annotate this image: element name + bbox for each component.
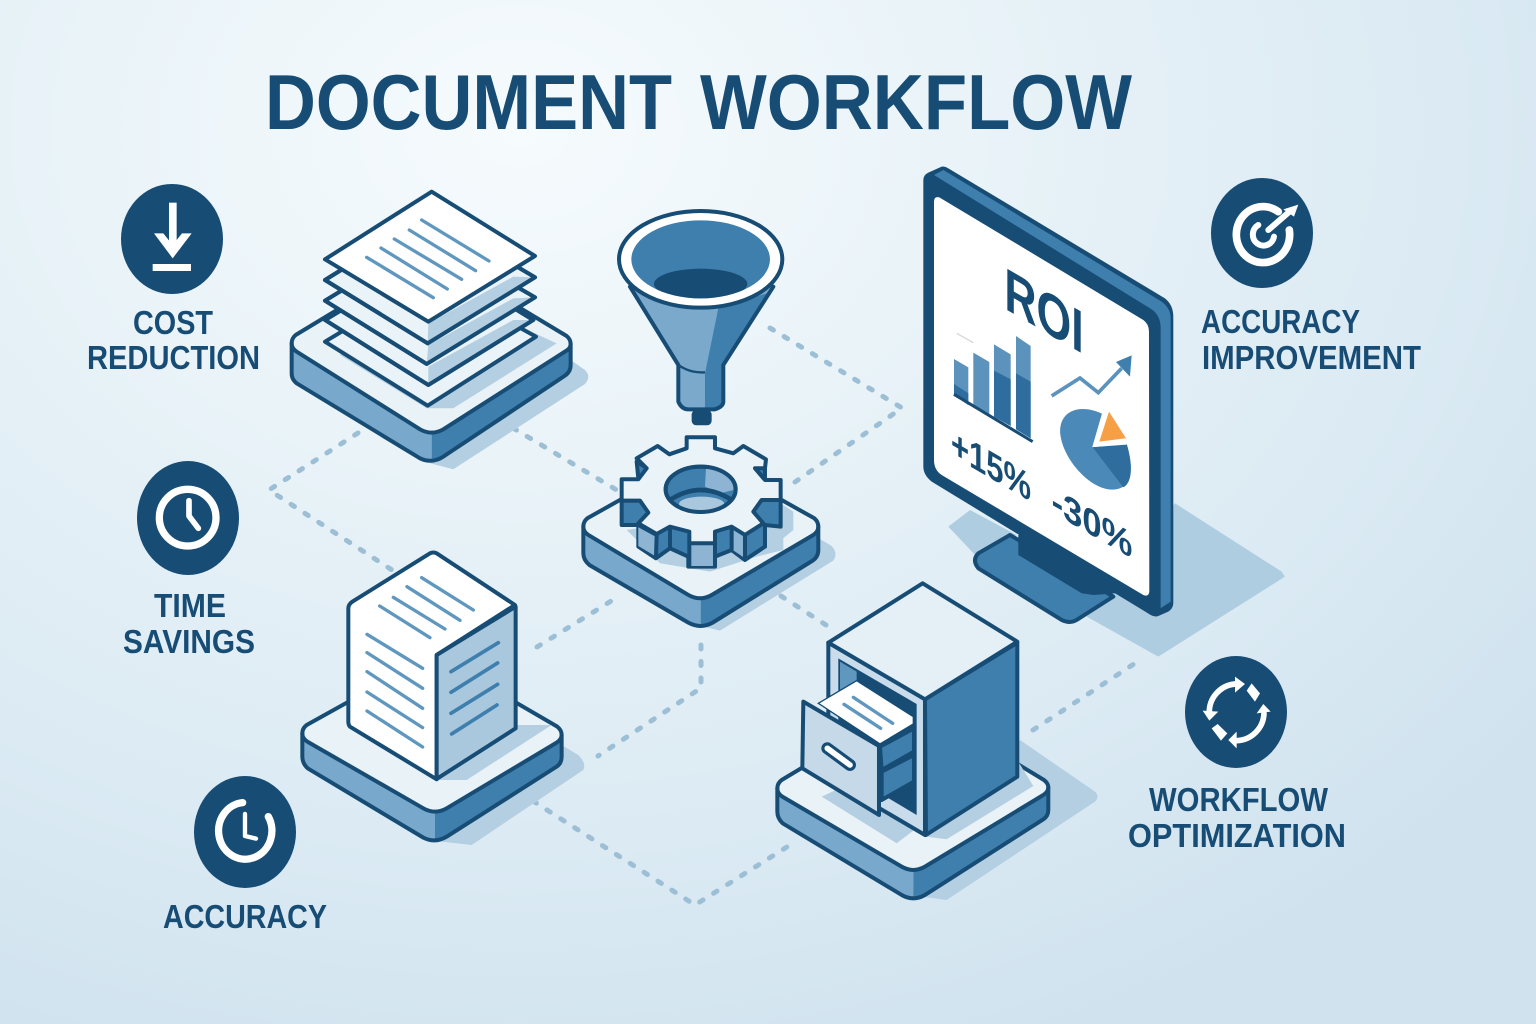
trend arrow bbox=[1052, 355, 1132, 396]
icon: download arrow bbox=[121, 184, 223, 294]
dashed connectors bbox=[269, 328, 1140, 905]
title: DOCUMENT bbox=[265, 58, 672, 146]
label: workflow optimization: WORKFLOW bbox=[1149, 781, 1329, 818]
label: accuracy: ACCURACY bbox=[163, 898, 327, 935]
label: time savings: SAVINGS bbox=[123, 623, 255, 660]
metric: time savings bbox=[123, 461, 255, 660]
title: WORKFLOW bbox=[700, 58, 1132, 146]
stat: -30%: -30% bbox=[1052, 478, 1132, 567]
label: accuracy improvement: ACCURACY bbox=[1201, 303, 1360, 340]
label: cost reduction: COST bbox=[133, 304, 213, 341]
sheet 3 bbox=[325, 237, 535, 364]
tower front bbox=[348, 552, 515, 779]
label: cost reduction: REDUCTION bbox=[87, 339, 260, 376]
cabinet left face bbox=[828, 643, 925, 835]
monitor body bbox=[923, 167, 1173, 616]
sheet 5 bbox=[325, 278, 536, 406]
funnel bbox=[619, 211, 782, 425]
pie chart bbox=[1060, 409, 1131, 490]
illustration: ROI monitor bbox=[923, 167, 1285, 657]
icon: clock bbox=[137, 461, 239, 575]
illustration: document tower on platform bbox=[302, 552, 584, 845]
cabinet top bbox=[828, 583, 1017, 699]
gear bbox=[622, 437, 781, 567]
sheet 1 with text lines bbox=[325, 192, 535, 322]
monitor screen bbox=[934, 197, 1149, 596]
drawer bbox=[802, 681, 914, 815]
illustration: document stack on platform bbox=[292, 192, 588, 469]
monitor stand bbox=[975, 533, 1117, 622]
sheet 4 bbox=[325, 257, 533, 385]
bar chart bbox=[954, 333, 1033, 442]
cabinet right face bbox=[925, 643, 1017, 835]
icon: target bbox=[1211, 178, 1313, 288]
illustration: filing cabinet on platform bbox=[777, 583, 1097, 900]
label: time savings: TIME bbox=[154, 587, 226, 624]
cabinet opening bbox=[838, 658, 917, 815]
metric: accuracy improvement bbox=[1201, 178, 1421, 376]
label: accuracy improvement: IMPROVEMENT bbox=[1202, 339, 1421, 376]
stat: +15%: +15% bbox=[951, 421, 1031, 511]
metric: workflow optimization bbox=[1128, 656, 1346, 854]
illustration: funnel and gear on platform bbox=[583, 211, 835, 631]
metric: cost reduction bbox=[87, 184, 260, 376]
metric: accuracy bbox=[163, 776, 327, 935]
tower side bbox=[437, 607, 516, 779]
sheet 2 bbox=[325, 215, 535, 343]
screen heading: ROI: ROI bbox=[1004, 254, 1084, 367]
label: workflow optimization: OPTIMIZATION bbox=[1128, 817, 1346, 854]
icon: timer bbox=[194, 776, 296, 888]
icon: cycle arrows bbox=[1185, 656, 1287, 768]
